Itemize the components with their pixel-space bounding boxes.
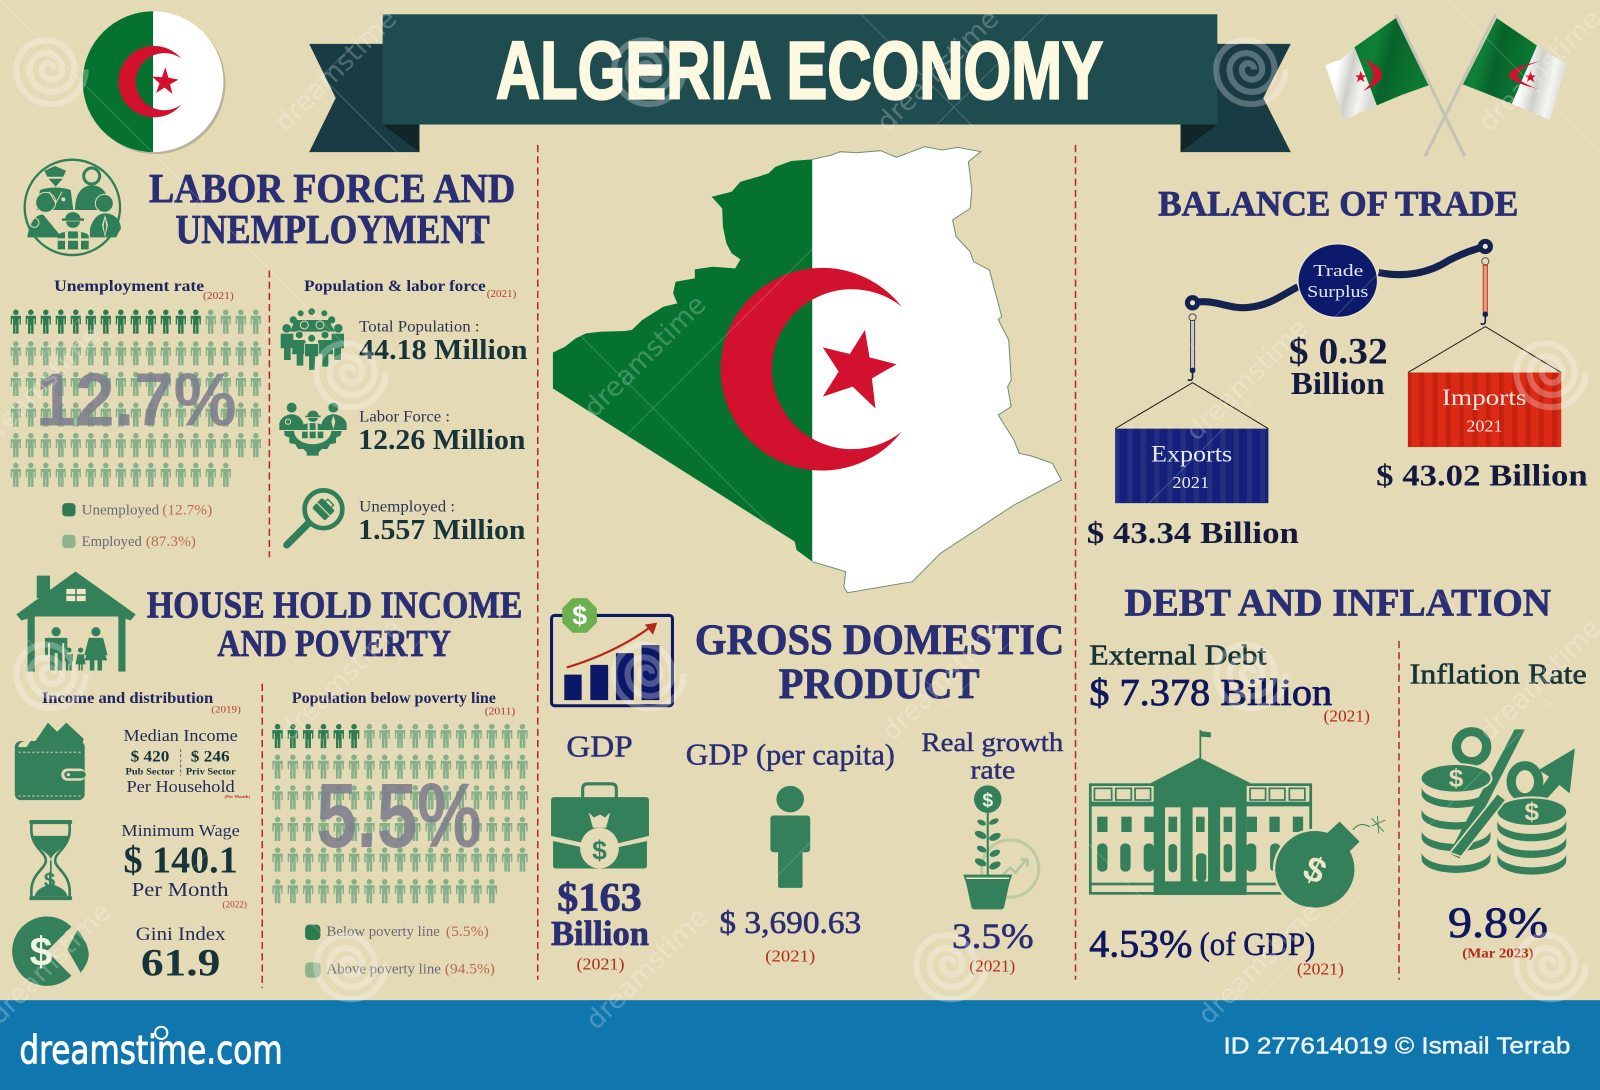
total population: Total Population :	[359, 319, 480, 336]
legend: unemployed / employed: Unemployed	[82, 502, 159, 518]
minimum wage: Per Month	[132, 879, 229, 901]
median income: Pub Sector	[126, 767, 175, 778]
big percent: 12.7%	[36, 359, 237, 443]
gini index	[136, 924, 226, 985]
real growth stat: (2021)	[969, 957, 1015, 976]
external debt: (2021)	[1323, 707, 1370, 726]
income label: Income and distribution	[42, 690, 214, 707]
labor force: 12.26 Million	[358, 425, 526, 456]
median income: Per Household	[127, 777, 235, 796]
minimum wage: Minimum Wage	[121, 821, 240, 840]
icon: growing money plant: $	[982, 789, 993, 811]
unemployment rate label: Unemployment rate	[54, 278, 204, 295]
median income: $ 420	[131, 748, 169, 765]
GDP stat	[551, 729, 649, 974]
icon: person	[770, 786, 810, 888]
inflation value: 9.8%	[1448, 900, 1548, 947]
GDP per capita stat	[686, 737, 895, 965]
icon: workers circle	[25, 160, 121, 255]
footer bar	[0, 1000, 1600, 1090]
GDP per capita stat: $ 3,690.63	[719, 905, 861, 940]
income label: (2019)	[211, 704, 241, 715]
trade surplus badge: Trade	[1313, 261, 1364, 280]
surplus value: $ 0.32	[1289, 330, 1388, 371]
heading	[695, 616, 1064, 708]
heading	[149, 166, 515, 252]
heading	[147, 584, 522, 665]
legend: unemployed / employed: Employed	[82, 534, 142, 550]
minimum wage	[121, 821, 247, 910]
trade surplus badge	[1298, 244, 1378, 317]
legend: poverty line: Below poverty line	[327, 924, 440, 940]
GDP per capita stat: (2021)	[765, 946, 815, 965]
icon: pie with dollar	[12, 916, 89, 986]
footer credit: ID 277614019 © Ismail Terrab	[1223, 1032, 1570, 1058]
exports value: $ 43.34 Billion	[1087, 516, 1299, 550]
legend: unemployed / employed: (12.7%)	[162, 502, 213, 518]
icon: briefcase	[551, 784, 649, 869]
icon: percent and coins: $	[1525, 798, 1539, 826]
icon: percent and coins: $	[1449, 765, 1463, 793]
surplus value	[1289, 330, 1388, 401]
icon: growing money plant	[963, 785, 1039, 909]
external debt: $ 7.378 Billion	[1089, 672, 1332, 714]
icon: growth chart: $	[572, 601, 587, 631]
minimum wage: (2022)	[222, 899, 247, 910]
panel: labor force and unemployment	[11, 160, 528, 550]
real growth stat: rate	[970, 755, 1015, 785]
surplus value: Billion	[1291, 366, 1385, 401]
icon: hourglass	[29, 820, 72, 900]
icon: house with family	[16, 572, 136, 672]
panel: household income and poverty	[12, 572, 528, 986]
external debt	[1089, 640, 1370, 726]
total population	[359, 319, 528, 366]
gini index: 61.9	[141, 942, 220, 985]
icon: government building with bomb: $	[1297, 848, 1333, 892]
heading: BALANCE OF TRADE	[1158, 183, 1518, 223]
real growth stat	[921, 727, 1063, 976]
unemployed count	[358, 498, 526, 546]
heading: PRODUCT	[779, 660, 980, 708]
heading: HOUSE HOLD INCOME	[147, 584, 522, 626]
exports container: Exports	[1151, 441, 1232, 467]
icon: government building with bomb	[1090, 730, 1385, 910]
heading: AND POVERTY	[217, 623, 451, 665]
legend: poverty line: (94.5%)	[445, 962, 495, 978]
debt to GDP: (2021)	[1297, 960, 1344, 979]
footer logo: dreamstime.com	[19, 1028, 283, 1073]
GDP stat: Billion	[551, 914, 649, 953]
icon: people on gear	[279, 403, 347, 456]
icon: growth chart	[552, 598, 672, 706]
GDP stat: (2021)	[577, 955, 624, 974]
debt to GDP: (of GDP)	[1199, 927, 1315, 963]
watermark overlay: dreamstime	[580, 901, 714, 1036]
icon: hourglass: $	[44, 870, 56, 892]
map of Algeria in flag colours	[552, 146, 1062, 594]
trade surplus badge: Surplus	[1307, 282, 1369, 301]
pictogram: unemployment 12.7%	[11, 310, 261, 487]
section dividers	[262, 145, 1399, 988]
inflation label: Inflation Rate	[1410, 659, 1587, 690]
watermark overlay: dreamstime	[871, 3, 1005, 138]
minimum wage: $ 140.1	[123, 840, 238, 882]
unemployed count: 1.557 Million	[358, 515, 526, 546]
watermark overlay: dreamstime	[1180, 313, 1314, 447]
legend: poverty line	[305, 924, 495, 978]
watermark overlay: dreamstime	[578, 289, 712, 424]
GDP per capita stat: GDP (per capita)	[686, 737, 895, 771]
inflation value: (Mar 2023)	[1462, 945, 1534, 961]
scale beam	[1187, 241, 1490, 308]
big percent: 5.5%	[316, 765, 482, 867]
panel: gross domestic product	[551, 598, 1064, 976]
poverty label: (2011)	[485, 706, 515, 717]
median income: Median Income	[123, 726, 238, 745]
real growth stat: 3.5%	[952, 916, 1034, 956]
unemployment rate label	[54, 278, 234, 302]
exports container	[1115, 314, 1268, 503]
debt to GDP	[1089, 922, 1344, 979]
median income	[123, 726, 250, 799]
total population: 44.18 Million	[359, 335, 528, 366]
population label: Population & labor force	[304, 278, 486, 295]
title ribbon	[309, 14, 1291, 152]
pictogram: poverty 5.5%	[272, 724, 528, 903]
inflation value	[1448, 900, 1548, 961]
icon: magnifier	[287, 490, 342, 545]
exports container: 2021	[1172, 473, 1209, 492]
icon: briefcase: $	[592, 835, 607, 865]
labor force: Labor Force :	[359, 409, 450, 426]
panel: debt and inflation	[1089, 581, 1587, 979]
crossed waving flags	[1325, 15, 1567, 156]
external debt: External Debt	[1089, 640, 1266, 671]
median income: $ 246	[191, 748, 230, 765]
heading: DEBT AND INFLATION	[1124, 581, 1551, 624]
gini index: Gini Index	[136, 924, 226, 945]
panel: balance of trade	[1087, 183, 1588, 550]
icon: wallet	[15, 723, 86, 800]
debt to GDP: 4.53%	[1089, 922, 1192, 965]
watermark overlay: dreamstime	[1192, 896, 1327, 1031]
heading: UNEMPLOYMENT	[176, 207, 490, 252]
imports container: Imports	[1442, 385, 1527, 411]
poverty label: Population below poverty line	[292, 690, 496, 707]
population label: (2021)	[487, 289, 516, 300]
icon: pie with dollar: $	[30, 928, 53, 974]
imports value: $ 43.02 Billion	[1376, 458, 1588, 492]
labor force	[358, 409, 526, 456]
median income: Priv Sector	[186, 767, 236, 778]
legend: unemployed / employed	[62, 502, 213, 550]
flag circle badge	[83, 11, 226, 154]
icon: percent and coins	[1420, 729, 1575, 875]
imports container	[1408, 258, 1561, 447]
income label	[42, 690, 241, 715]
watermark overlay: dreamstime	[876, 613, 1010, 747]
population label	[304, 278, 516, 300]
legend: unemployed / employed: (87.3%)	[146, 534, 196, 550]
median income: (Per Month)	[224, 794, 250, 799]
poverty label	[292, 690, 515, 717]
watermark overlay: dreamstime	[274, 613, 408, 747]
legend: poverty line: Above poverty line	[327, 962, 441, 978]
GDP stat: $163	[557, 875, 642, 919]
icon: crowd	[281, 308, 344, 370]
unemployed count: Unemployed :	[359, 498, 455, 515]
unemployment rate label: (2021)	[203, 291, 234, 302]
heading: GROSS DOMESTIC	[695, 616, 1064, 664]
watermark overlay: dreamstime	[269, 3, 403, 138]
heading: LABOR FORCE AND	[149, 166, 515, 211]
title: ALGERIA ECONOMY	[496, 25, 1103, 116]
real growth stat: Real growth	[921, 727, 1063, 757]
imports container: 2021	[1466, 417, 1503, 436]
GDP stat: GDP	[566, 729, 633, 763]
legend: poverty line: (5.5%)	[446, 924, 489, 940]
